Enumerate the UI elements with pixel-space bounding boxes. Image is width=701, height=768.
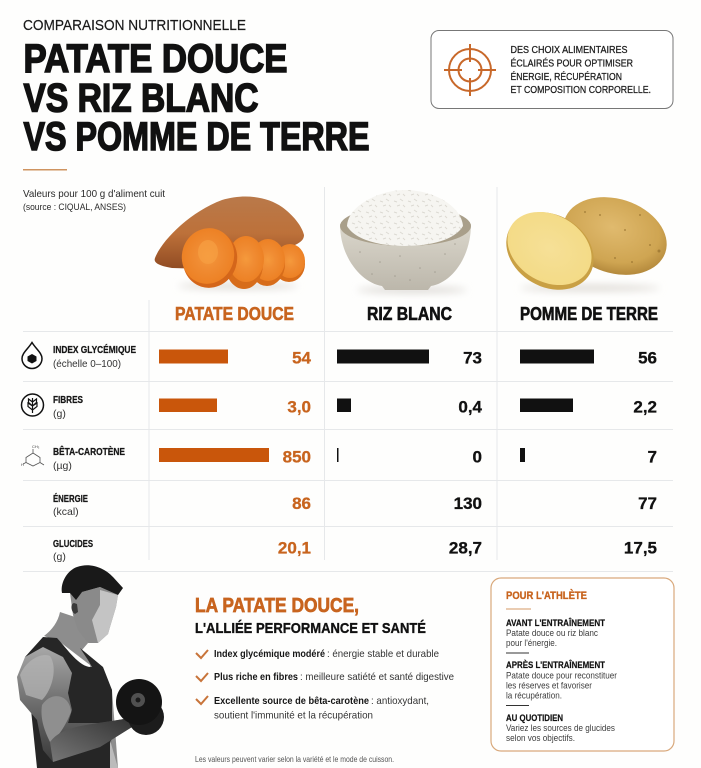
callout text bbox=[510, 45, 651, 96]
row: index glycemique bbox=[22, 342, 657, 370]
row: index glycemique: 73 bbox=[463, 348, 482, 368]
row: beta-carotene: 7 bbox=[648, 448, 657, 466]
slice 4 bbox=[273, 244, 305, 282]
advice: avant: Patate douce ou riz blanc bbox=[506, 628, 598, 638]
benefits list bbox=[196, 649, 454, 722]
benefit: fibres: : meilleure satiété et santé digestive bbox=[300, 672, 454, 683]
header: riz blanc: RIZ BLANC bbox=[367, 304, 452, 324]
row: index glycemique: 54 bbox=[292, 348, 312, 368]
icon: wheat bbox=[22, 394, 44, 416]
benefit: index glycemique: Index glycémique modéré bbox=[214, 649, 325, 660]
icon: target bbox=[444, 44, 496, 96]
row: energie: 86 bbox=[292, 494, 311, 513]
advice: quotidien: Variez les sources de glucides bbox=[506, 723, 615, 733]
advice: apres: les réserves et favoriser bbox=[506, 680, 592, 690]
hair bbox=[62, 565, 123, 600]
title: PATATE DOUCE bbox=[24, 37, 288, 81]
row: beta-carotene bbox=[21, 444, 657, 472]
row: glucides: 28,7 bbox=[449, 538, 482, 558]
title accent rule bbox=[23, 169, 67, 170]
advice: avant: AVANT L'ENTRAÎNEMENT bbox=[506, 617, 605, 629]
row: beta-carotene: 0 bbox=[473, 448, 482, 466]
eyebrow heading: COMPARAISON NUTRITIONNELLE bbox=[23, 18, 246, 34]
title bbox=[24, 37, 370, 159]
panel heading: POUR L'ATHLÈTE bbox=[506, 589, 587, 602]
face bbox=[70, 587, 118, 643]
advice: apres: Patate douce pour reconstituer bbox=[506, 670, 617, 680]
callout text: ÉCLAIRÉS POUR OPTIMISER bbox=[510, 56, 633, 70]
benefit: fibres bbox=[196, 672, 454, 683]
row: glucides: GLUCIDES bbox=[53, 539, 93, 550]
title: VS POMME DE TERRE bbox=[24, 115, 370, 159]
column headers bbox=[175, 304, 658, 324]
row: glucides bbox=[53, 538, 657, 563]
skin below the vest bbox=[110, 740, 118, 768]
benefit: beta-carotene: soutient l'immunité et la récupération bbox=[214, 710, 373, 722]
advice: apres: la récupération. bbox=[506, 690, 562, 700]
row: index glycemique: 56 bbox=[638, 348, 657, 368]
row: beta-carotene: (µg) bbox=[53, 460, 72, 472]
row: fibres: FIBRES bbox=[53, 395, 83, 406]
row: index glycemique: INDEX GLYCÉMIQUE bbox=[53, 343, 136, 356]
icon: molecule bbox=[21, 444, 44, 467]
benefit: beta-carotene bbox=[196, 696, 429, 722]
illustration: athlete bbox=[17, 565, 164, 768]
advice: quotidien: AU QUOTIDIEN bbox=[506, 713, 563, 724]
neck and traps bbox=[44, 612, 118, 768]
title: VS RIZ BLANC bbox=[24, 76, 258, 120]
icon: drop bbox=[22, 342, 42, 369]
icon: molecule: CH₃ bbox=[32, 444, 40, 449]
footnote: Les valeurs peuvent varier selon la variété et le mode de cuisson. bbox=[195, 755, 394, 764]
slice 1 bbox=[175, 221, 245, 295]
row: fibres: 0,4 bbox=[458, 398, 483, 416]
vest bbox=[25, 637, 112, 768]
illustration: sweet potato bbox=[155, 196, 305, 295]
heading: la patate douce: LA PATATE DOUCE, bbox=[195, 595, 359, 617]
advice: apres bbox=[506, 659, 617, 700]
row: fibres: 3,0 bbox=[287, 398, 311, 416]
row: fibres: 2,2 bbox=[633, 398, 657, 416]
advice: quotidien bbox=[506, 713, 615, 743]
biceps shading bbox=[41, 696, 71, 742]
row: energie: 130 bbox=[454, 494, 482, 513]
row: glucides: 17,5 bbox=[624, 538, 657, 558]
row: fibres bbox=[22, 394, 657, 420]
benefit: beta-carotene: Excellente source de bêta-carotène bbox=[214, 696, 369, 707]
advice: avant: pour l'énergie. bbox=[506, 638, 557, 648]
panel: pour l'athlete bbox=[491, 578, 674, 751]
heading: la patate douce: L'ALLIÉE PERFORMANCE ET SANTÉ bbox=[195, 620, 426, 637]
row: glucides: 20,1 bbox=[278, 538, 311, 558]
forearm bbox=[50, 718, 132, 762]
illustration: rice bowl bbox=[340, 190, 471, 293]
advice: avant bbox=[506, 617, 605, 648]
benefit: beta-carotene: : antioxydant, bbox=[371, 696, 429, 707]
arm bbox=[17, 647, 132, 762]
row: energie: (kcal) bbox=[53, 506, 79, 518]
row: glucides: (g) bbox=[53, 551, 66, 563]
advice: quotidien: selon vos objectifs. bbox=[506, 733, 575, 743]
row: beta-carotene: BÊTA-CAROTÈNE bbox=[53, 445, 125, 458]
callout text: DES CHOIX ALIMENTAIRES bbox=[510, 45, 628, 56]
row: energie: ÉNERGIE bbox=[53, 492, 88, 505]
row: beta-carotene: 850 bbox=[283, 448, 311, 466]
slice 3 bbox=[249, 239, 285, 286]
advice: apres: APRÈS L'ENTRAÎNEMENT bbox=[506, 659, 605, 671]
callout text: ÉNERGIE, RÉCUPÉRATION bbox=[510, 70, 622, 83]
benefit: fibres: Plus riche en fibres bbox=[214, 672, 298, 683]
callout text: ET COMPOSITION CORPORELLE. bbox=[510, 85, 651, 96]
benefit: index glycemique bbox=[196, 649, 439, 660]
header: patate douce: PATATE DOUCE bbox=[175, 304, 294, 324]
slice 2 bbox=[225, 236, 264, 289]
row: energie: 77 bbox=[638, 494, 657, 513]
heading: la patate douce bbox=[195, 595, 426, 637]
callout: objective bbox=[431, 30, 673, 108]
row: fibres: (g) bbox=[53, 408, 66, 420]
icon: molecule: H bbox=[21, 462, 24, 467]
source note bbox=[23, 188, 165, 213]
dumbbell bbox=[128, 699, 164, 735]
table grid lines bbox=[23, 187, 673, 572]
row: energie bbox=[53, 492, 657, 518]
header: pomme de terre: POMME DE TERRE bbox=[520, 304, 658, 324]
deltoid highlight bbox=[20, 655, 54, 700]
illustration: potatoes bbox=[492, 184, 677, 305]
row: index glycemique: (échelle 0–100) bbox=[53, 358, 121, 370]
benefit: index glycemique: : énergie stable et durable bbox=[327, 649, 439, 660]
source note: (source : CIQUAL, ANSES) bbox=[23, 202, 126, 213]
source note: Valeurs pour 100 g d'aliment cuit bbox=[23, 188, 165, 200]
